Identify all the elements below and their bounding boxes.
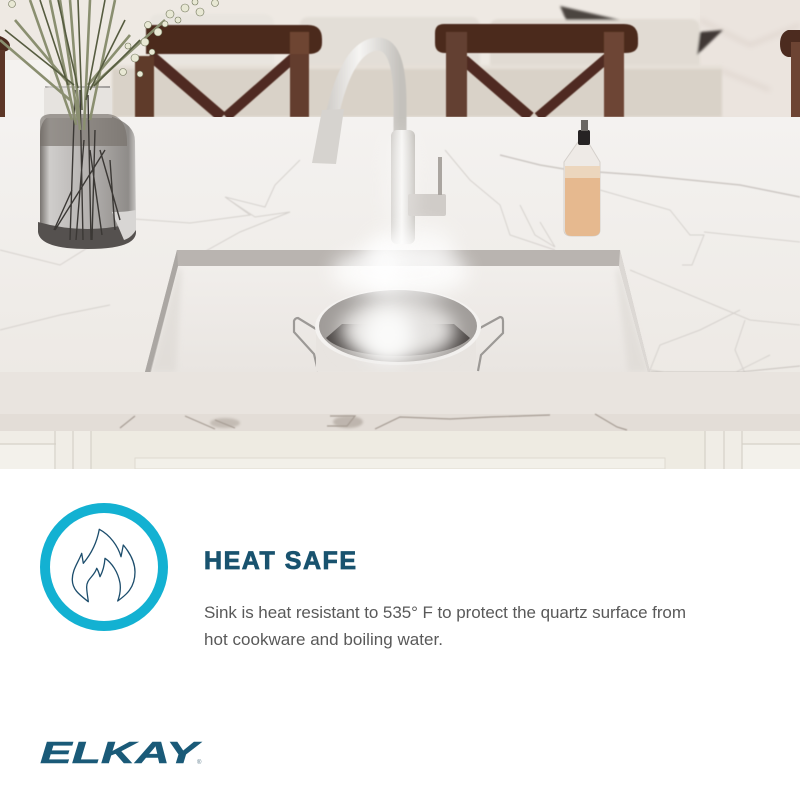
body text: hot cookware and boiling water.	[204, 630, 443, 649]
countertop front edge	[0, 372, 800, 431]
Elkay logo: ELKAY	[40, 735, 203, 770]
marble countertop	[0, 117, 800, 415]
heading: HEAT SAFE	[204, 547, 356, 575]
faucet	[312, 44, 446, 244]
marble veins	[0, 150, 800, 390]
left wooden chair	[135, 25, 322, 117]
sofa	[112, 6, 723, 117]
vase body	[40, 86, 136, 248]
undermount sink	[145, 250, 650, 372]
soap bottle	[564, 120, 600, 236]
pot handles	[294, 317, 503, 371]
icon: flame in cyan ring	[45, 508, 163, 626]
far chairs at image edges	[0, 30, 800, 117]
greenery	[0, 0, 165, 130]
Elkay logo: ®	[197, 759, 202, 766]
Elkay logo	[40, 735, 203, 770]
body text: Sink is heat resistant to 535° F to protect the quartz surface from	[204, 603, 686, 622]
white cabinets	[0, 431, 800, 469]
steam rising from pot	[332, 130, 468, 298]
white lower panel	[0, 469, 800, 800]
body text	[204, 603, 686, 649]
stainless pot with boiling water	[294, 289, 503, 371]
right wooden chair	[435, 24, 638, 117]
background room	[0, 0, 800, 118]
glass vase with greenery	[0, 0, 218, 249]
